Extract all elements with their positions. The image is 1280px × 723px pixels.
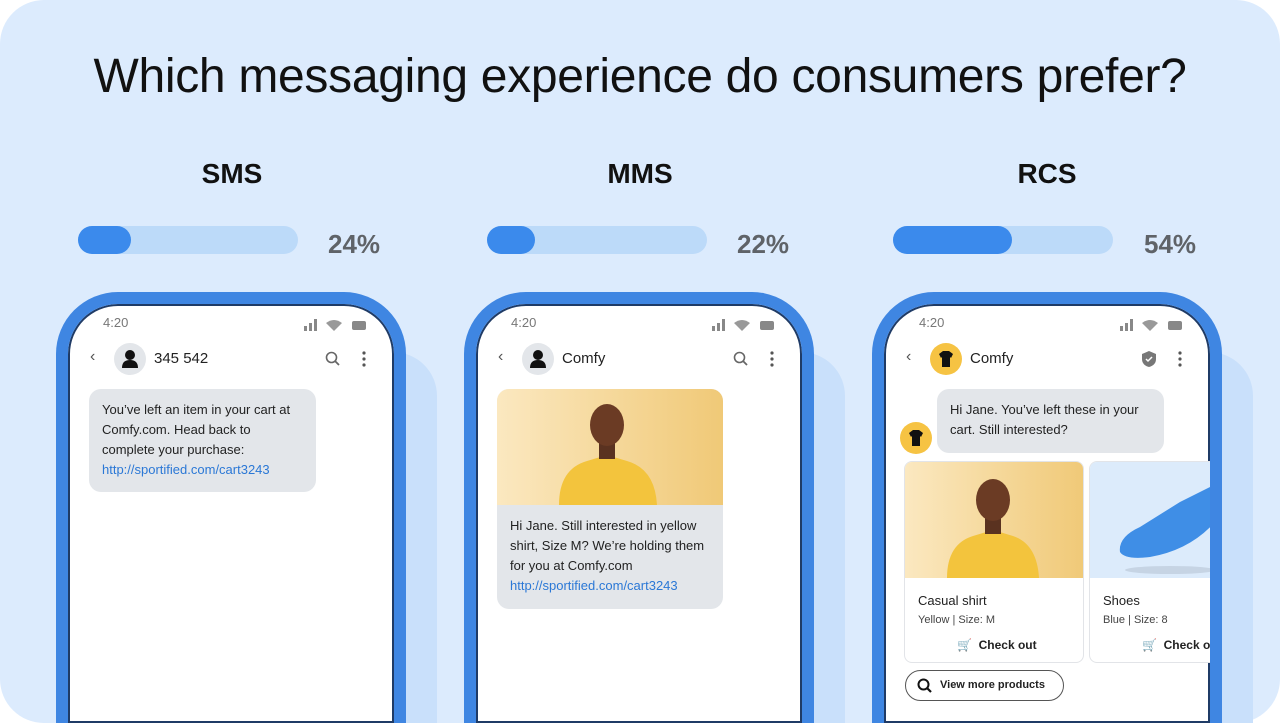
phone: SMS (56, 292, 406, 723)
phone: SMS: 4:20 (103, 315, 128, 330)
title: Which messaging experience do consumers prefer? (93, 50, 1187, 103)
message bubble (89, 389, 316, 492)
phone: RCS (872, 292, 1222, 723)
icon: avatar (522, 343, 554, 375)
phone: RCS: Comfy (970, 350, 1013, 367)
phone: RCS: ‹ (906, 348, 911, 365)
bar: SMS 24% (78, 226, 298, 254)
phone: SMS: ‹ (90, 348, 95, 365)
card: shoes: 🛒 Check out (1142, 638, 1222, 652)
MMS message with image (497, 389, 723, 609)
button: view more products: View more products (940, 679, 1045, 691)
message bubble: Hi Jane. You’ve left these in your cart. Still interested? (950, 402, 1139, 437)
card: shoes: Blue | Size: 8 (1103, 614, 1168, 626)
phone: RCS: 4:20 (919, 315, 944, 330)
phone: MMS: 4:20 (511, 315, 536, 330)
heading: RCS: RCS (1017, 158, 1077, 189)
phone: MMS (464, 292, 814, 723)
MMS message with image: http://sportified.com/cart3243 (510, 578, 678, 593)
message bubble (937, 389, 1164, 453)
image: man in yellow shirt (497, 389, 723, 505)
icon: avatar (114, 343, 146, 375)
button: view more products (905, 670, 1064, 701)
heading: SMS: SMS (202, 158, 262, 189)
icon: small brand avatar (900, 422, 932, 454)
value: RCS: 54% (1144, 229, 1196, 259)
card: casual shirt: 🛒 Check out (957, 638, 1037, 652)
bar: RCS 54% (893, 226, 1113, 254)
card: shoes: Shoes (1103, 593, 1140, 608)
card: casual shirt (904, 461, 1084, 663)
phone: SMS: 345 542 (154, 350, 208, 367)
phone: MMS: Comfy (562, 350, 605, 367)
bar: MMS 22% (487, 226, 707, 254)
MMS message with image: Hi Jane. Still interested in yellow shirt, Size M? We’re holding them for you at Comfy.com (510, 518, 704, 573)
message bubble: http://sportified.com/cart3243 (102, 462, 270, 477)
icon: brand avatar (930, 343, 962, 375)
card: shoes (1089, 461, 1269, 663)
value: SMS: 24% (328, 229, 380, 259)
card: casual shirt: Yellow | Size: M (918, 614, 995, 626)
heading: MMS: MMS (607, 158, 673, 189)
value: MMS: 22% (737, 229, 789, 259)
icon: verified shield (1142, 351, 1156, 367)
card: casual shirt: Casual shirt (918, 593, 987, 608)
message bubble: You’ve left an item in your cart at Comfy.com. Head back to complete your purchase: (102, 402, 290, 457)
phone: MMS: ‹ (498, 348, 503, 365)
